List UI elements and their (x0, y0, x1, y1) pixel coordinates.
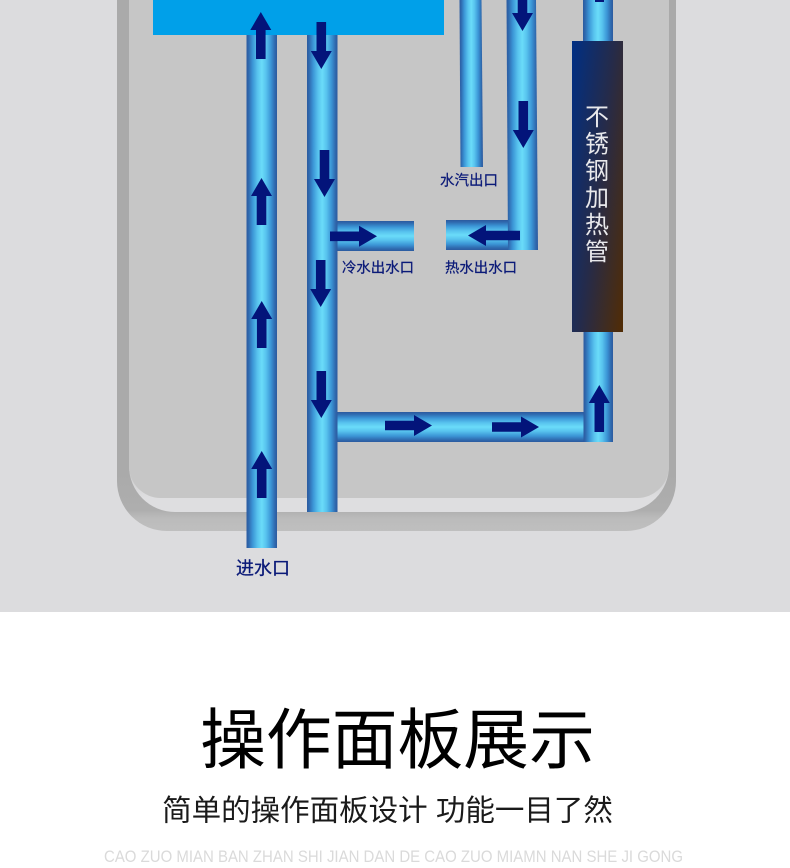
heating tube label: 不 (585, 104, 609, 131)
blue top tank (153, 0, 444, 35)
pinyin caption: CAO ZUO MIAN BAN ZHAN SHI JIAN DAN DE CAO ZUO MIAMN NAN SHE JI GONG (104, 847, 683, 866)
label: cold water outlet: 冷水出水口 (342, 260, 414, 276)
arrow: heater top tail (595, 0, 604, 2)
arrow: inlet up 4 (251, 451, 272, 498)
pipe: hot water outlet branch (446, 220, 510, 250)
heating tube label: 热 (585, 212, 609, 239)
flow arrows (250, 0, 610, 498)
arrow: hot riser down 2 (513, 101, 534, 148)
pipe: water inlet (246, 35, 277, 548)
arrow: cold main down 3 (310, 260, 331, 307)
arrow: cold outlet right (330, 226, 377, 247)
arrow: inlet up 3 (251, 301, 272, 348)
background panel (0, 0, 790, 612)
arrow: cold main down 1 (311, 22, 332, 69)
arrow: inlet up 2 (251, 178, 272, 225)
stainless steel heating tube (572, 41, 623, 332)
pipe: hot water riser (506, 0, 538, 250)
pipe: cold water main (307, 35, 338, 512)
pipe: cold water outlet (338, 221, 414, 251)
arrow: hot outlet left (468, 225, 520, 246)
heater body shell (117, 0, 676, 531)
arrow: hot riser down 1 (512, 0, 533, 31)
heating tube label: 加 (585, 185, 609, 212)
title: 操作面板展示 (200, 703, 595, 777)
pipe: heater bottom (584, 331, 613, 442)
heating tube label: 钢 (585, 158, 609, 185)
pipe: lower horizontal (338, 412, 584, 442)
arrow: lower pipe right 1 (385, 415, 432, 436)
label: water inlet: 进水口 (236, 558, 290, 578)
label: steam outlet: 水汽出口 (440, 172, 498, 190)
arrow: cold main down 4 (311, 371, 332, 418)
arrow: inlet up 1 (250, 12, 271, 59)
pipe: steam outlet (460, 0, 483, 167)
subtitle: 简单的操作面板设计 功能一目了然 (162, 794, 613, 828)
arrow: lower pipe right 2 (492, 416, 539, 438)
heating tube label: 锈 (585, 131, 609, 158)
arrow: cold main down 2 (314, 150, 335, 197)
label: hot water outlet: 热水出水口 (445, 260, 517, 276)
arrow: heater bottom up (589, 385, 610, 432)
pipe network (246, 0, 613, 548)
heating tube label: 管 (585, 239, 609, 266)
pipe: heater top (583, 0, 613, 42)
